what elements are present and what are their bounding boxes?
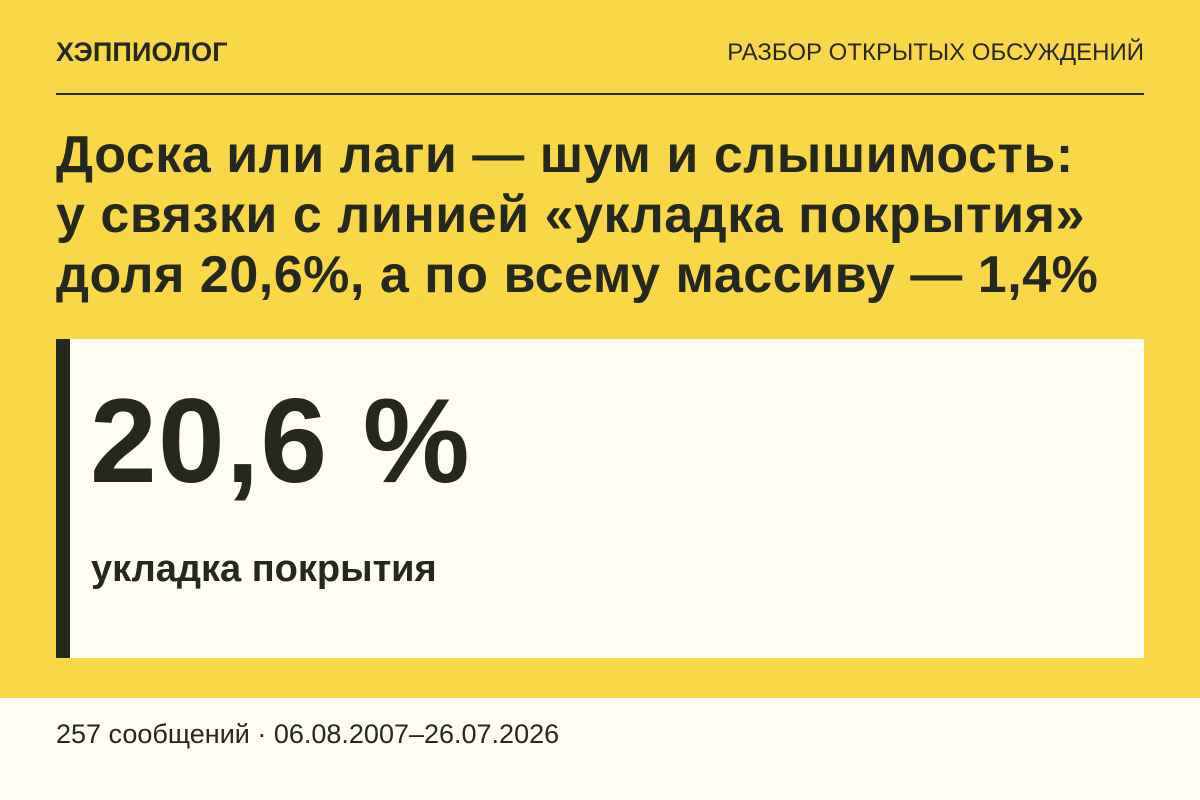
title [56,126,1098,304]
header section label: РАЗБОР ОТКРЫТЫХ ОБСУЖДЕНИЙ [727,39,1144,66]
panel: key stat [56,339,1144,658]
title: Доска или лаги — шум и слышимость: [56,126,1074,184]
footer [0,698,1200,800]
stat label: укладка покрытия [91,548,437,590]
footer text: 257 сообщений · 06.08.2007–26.07.2026 [56,719,559,749]
big number: 20,6 % [90,374,471,508]
title: доля 20,6%, а по всему массиву — 1,4% [56,246,1098,304]
accent bar [56,339,70,658]
title: у связки с линией «укладка покрытия» [56,186,1085,244]
brand name: ХЭППИОЛОГ [56,37,228,67]
